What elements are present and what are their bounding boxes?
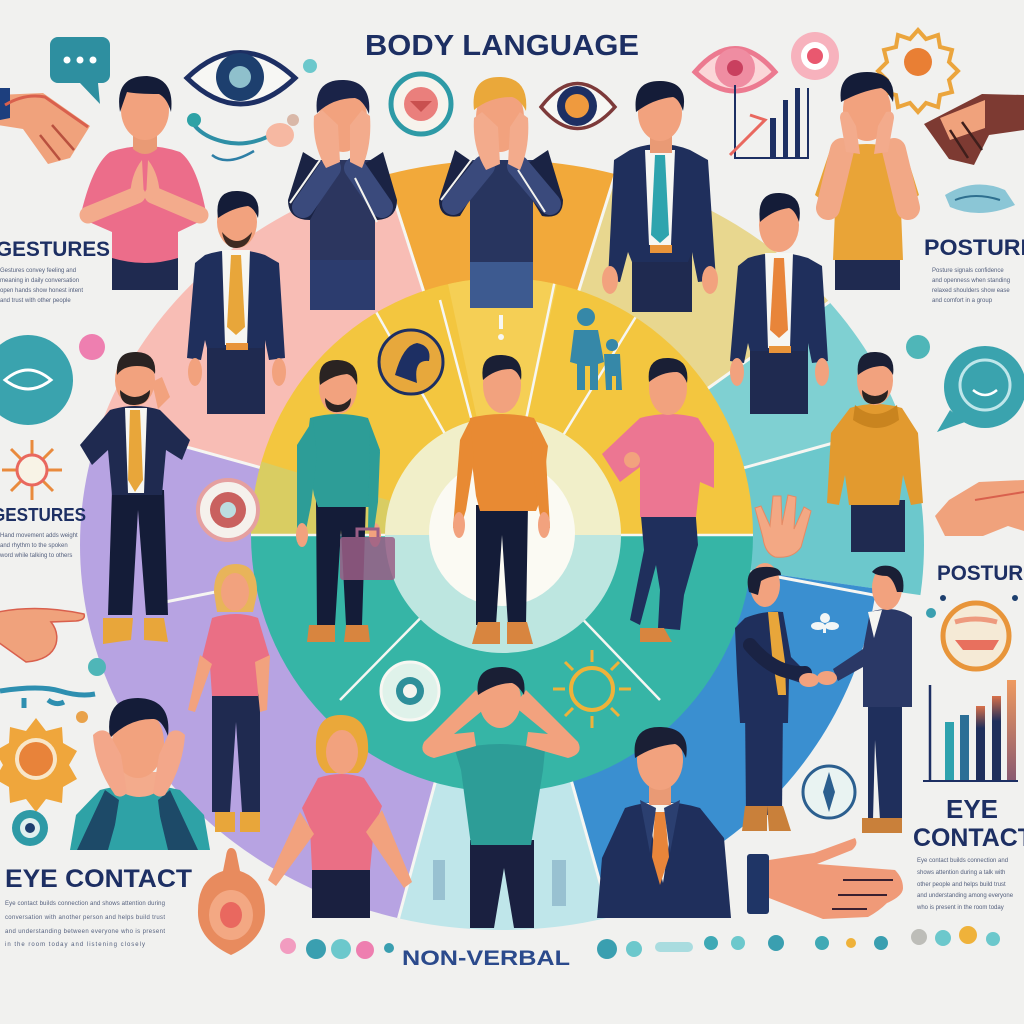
icon: handshake top left [0,88,90,164]
icon: mouth badge right [943,603,1009,669]
text block: gestures top: and trust with other people [0,298,71,304]
heading: non-verbal: NON-VERBAL [402,947,570,970]
text block: gestures top: meaning in daily conversation [0,278,79,284]
icon: teal circle left [0,335,73,425]
text block: eye contact right: who is present in the room today [916,905,1004,911]
title: BODY LANGUAGE [365,30,639,62]
icon: sun left [2,440,62,500]
icon: brush marks left [0,688,95,708]
person: pink sweater, hand on hip [602,358,714,642]
icon: coloured dots [76,334,1018,949]
icon: adult and child silhouettes [570,308,622,390]
icon: orange sun top right [878,30,958,112]
text block: eye contact left: in the room today and listening closely [5,942,145,948]
person: handshake, right man [817,566,912,833]
icon: small eye bottom left [12,810,48,846]
icon: gear sun bottom left [0,718,77,812]
icon: handshake top right [924,94,1024,165]
icon: ear badge bottom [198,848,265,955]
icon: sun bottom centre [553,650,631,728]
icon: eye ring bottom centre [381,662,439,720]
text block: posture top: relaxed shoulders show ease [932,288,1010,294]
person: suit with orange tie, left [187,191,286,414]
icon: target badge left [198,480,258,540]
panel: outer wheel segments [80,162,924,930]
icon: silhouette badge centre [379,330,443,394]
person: centre, orange sweater [453,355,550,644]
icon: key shapes bottom wedge [433,860,566,906]
text block: gestures middle [0,533,78,559]
heading: eye contact left: EYE CONTACT [5,865,192,893]
person: bottom left, hands on face [70,698,210,850]
person: bearded man in suit, left [80,352,190,644]
heading: eye contact right: EYE [946,794,998,824]
icon: exclamation above centre [498,315,504,340]
text block: gestures top [0,268,83,304]
text block: posture top [932,268,1010,304]
person: yellow shirt, hands on face [815,72,919,290]
text block: eye contact right [916,858,1014,911]
decorative dots row [280,926,1000,959]
text block: gestures middle: and rhythm to the spoken [0,543,68,549]
panel: middle ring [240,270,770,800]
person: blond, hands on face [439,77,563,308]
person: dark sweater, hands on face [288,80,397,310]
text block: posture top: Posture signals confidence [932,268,1004,274]
icon: small squiggles and figure [187,59,317,160]
icon: pointing hand right [935,480,1024,536]
text block: eye contact left: conversation with another person and helps build trust [5,915,165,921]
text block: posture top: and openness when standing [932,278,1010,284]
icon: pink eye [695,48,775,91]
text block: posture top: and comfort in a group [932,298,993,304]
text block: gestures middle: word while talking to others [0,553,72,559]
person: suit with teal tie [602,81,718,312]
icon: pointing hand left [0,608,84,662]
text block: eye contact left: Eye contact builds connection and shows attention during [5,901,165,907]
icon: pink target [791,32,839,80]
person: woman in pink, standing [188,564,270,832]
person: suit with orange tie, right [730,193,829,414]
icon: bar chart top [730,85,808,158]
icon: speech bubble [50,37,110,104]
text block: eye contact left [5,901,165,948]
bar chart right [923,680,1018,781]
person: bottom man in suit [597,727,731,918]
icon: eye orange [541,84,615,128]
heading: eye contact right [913,794,1024,852]
panel: inner disc [385,417,621,653]
text block: eye contact right: and understanding among everyone [917,893,1014,899]
icon: raised hand [755,495,811,557]
icon: ring badge top [391,74,451,134]
person: teal shirt, hands on head [422,667,580,928]
text block: eye contact right: other people and helps build trust [917,882,1006,888]
text block: gestures top: Gestures convey feeling and [0,268,76,274]
icon: large eye top [187,52,295,104]
icon: small flower in blue panel [811,613,839,633]
text block: eye contact right: shows attention during a talk with [917,870,1005,876]
text block: eye contact right: Eye contact builds connection and [917,858,1008,864]
text block: gestures middle: Hand movement adds weight [0,533,78,539]
text block: gestures top: open hands show honest intent [0,288,83,294]
person: pink sweater, hands together [80,76,207,290]
icon: open hand bottom right [747,838,903,919]
person: teal shirt with briefcase [296,360,395,642]
icon: compass [803,766,855,818]
person: yellow hoodie [827,352,923,552]
person: blonde woman in pink, lower [268,715,412,918]
text block: eye contact left: and understanding between everyone who is present [5,929,165,935]
icon: teal smile bubble right [937,346,1024,432]
icon: fish-like graphic right [945,185,1015,213]
person: handshake, left man [735,563,819,831]
